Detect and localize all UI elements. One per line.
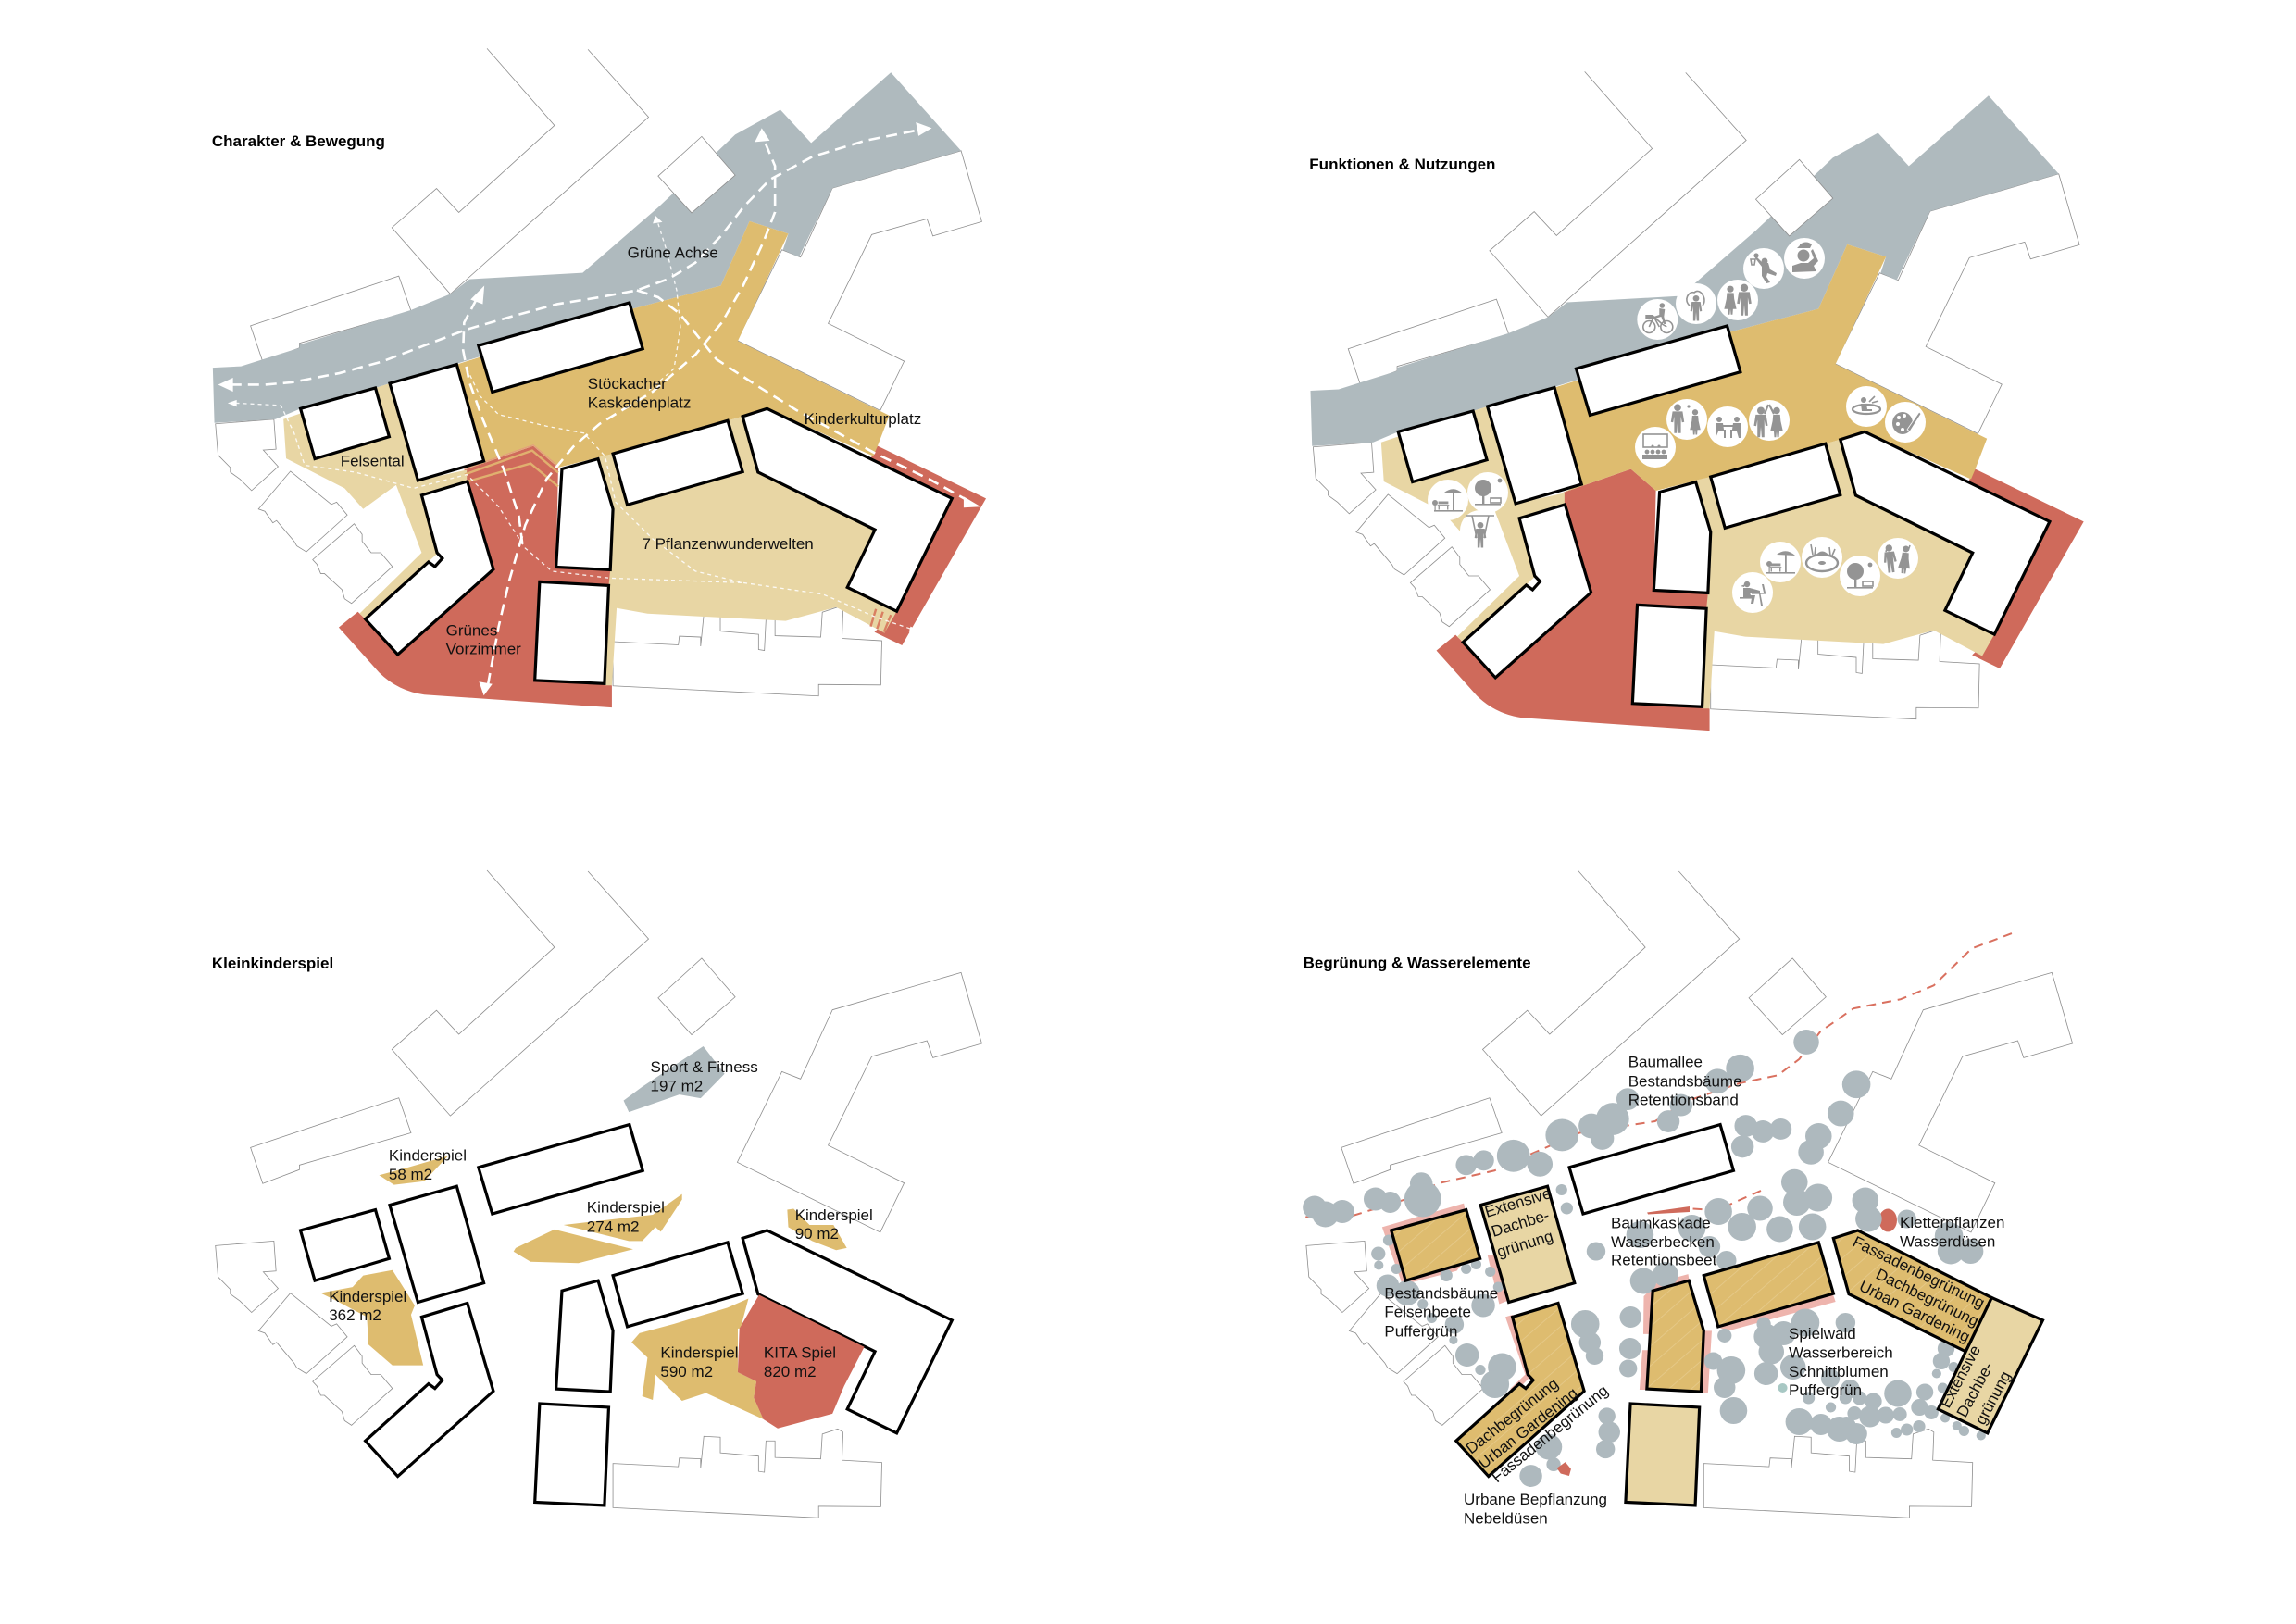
roof label: Extensive Dachbegrünung right: grünung [1972,1368,2015,1428]
label: KITA Spiel 820 m2: KITA Spiel [764,1343,836,1361]
label: Sport & Fitness: 197 m2 [650,1078,703,1095]
roof label: right wing [1850,1233,1988,1346]
label: Kinderspiel 362 m2: 362 m2 [329,1306,381,1324]
roof label: Dachbegrünung Urban Gardening: Dachbegrünung [1463,1375,1562,1457]
panel: Charakter & Bewegung [212,48,986,707]
icon: water play [1846,386,1887,427]
icon: outdoor cinema [1635,427,1676,468]
icon: tree and bench 2 [1840,556,1880,596]
roof label: Extensive Dachbegrünung left: grünung [1495,1227,1555,1261]
roof label: Extensive Dachbegrünung right: Extensive [1937,1343,1984,1411]
label: Kinderspiel 58 m2: 58 m2 [389,1166,432,1183]
icon: basketball [1743,248,1784,289]
label: Kinderspiel 590 m2: Kinderspiel [660,1343,739,1361]
label: Stöckacher Kaskadenplatz: Stöckacher [588,375,667,393]
label: Kinderspiel 274 m2: Kinderspiel [587,1198,665,1217]
movement arrows [218,122,980,695]
label: Spielwald: Wasserbereich [1789,1343,1893,1361]
roof label: Extensive Dachbegrünung left: Dachbe- [1490,1206,1552,1241]
label: Kletterpflanzen: Kletterpflanzen [1900,1214,2004,1231]
label: Kinderspiel 274 m2: 274 m2 [587,1218,640,1235]
label: Kinderspiel 362 m2: Kinderspiel [329,1288,406,1305]
label: Spielwald: Spielwald [1789,1325,1856,1343]
icon: high five [1749,400,1790,441]
label: Grünes Vorzimmer: Grünes [446,622,497,640]
label: Bestandsbäume: Felsenbeete [1384,1303,1471,1320]
label: Spielwald: Schnittblumen [1789,1363,1889,1380]
heading: Kleinkinderspiel: Kleinkinderspiel [212,955,333,972]
label: Bestandsbäume: Bestandsbäume [1384,1285,1498,1302]
icon: couple walking [1717,280,1758,320]
site plan areas [213,48,986,707]
icon: tree and bench [1467,472,1508,513]
heading: Funktionen & Nutzungen: Funktionen & Nutzungen [1309,156,1495,173]
label: Stöckacher Kaskadenplatz: Kaskadenplatz [588,394,691,411]
label: Bestandsbäume: Puffergrün [1384,1322,1457,1340]
label: Baumallee: Bestandsbäume [1628,1073,1742,1091]
icon: dancing children [1878,538,1918,579]
roof label: right wing: Dachbegrünung [1873,1266,1981,1330]
panel: Funktionen & Nutzungen [1309,71,2084,731]
label: Baumallee: Retentionsband [1628,1092,1739,1109]
facade label: Fassadenbegrünung: Fassadenbegrünung [1489,1381,1612,1486]
icon: head with cap [1784,238,1825,279]
icon: bicycle [1637,299,1678,340]
site plan areas [1310,71,2084,731]
roof label: Dachbegrünung Urban Gardening: Urban Gardening [1475,1384,1581,1472]
label: Kinderspiel 590 m2: 590 m2 [660,1363,713,1380]
icon: picnic under umbrella 2 [1760,542,1801,582]
panel: Kleinkinderspiel [212,870,981,1518]
roof label: Extensive Dachbegrünung left [1483,1184,1555,1261]
base plan [216,870,981,1518]
heading: Begrünung & Wasserelemente: Begrünung & Wasserelemente [1304,954,1531,971]
roof label: right wing: Urban Gardening [1856,1278,1973,1346]
icon: table with people [1707,406,1748,447]
label: Spielwald: Puffergrün [1789,1381,1862,1399]
facade greening, water line, trees [1305,933,2012,1487]
roof label: Extensive Dachbegrünung left: Extensive [1483,1184,1554,1221]
icon: palette [1885,402,1926,443]
label: Grüne Achse: Grüne Achse [628,244,718,262]
label: Kinderspiel 90 m2: 90 m2 [795,1225,839,1243]
label: Baumkaskade: Wasserbecken [1611,1233,1715,1251]
play areas [320,1046,865,1429]
label: Urbane Bepflanzung: Urbane Bepflanzung [1464,1491,1607,1508]
label: Kinderspiel 58 m2: Kinderspiel [389,1146,467,1164]
label: Baumkaskade: Retentionsbeet [1611,1252,1717,1269]
panel: Begrünung & Wasserelemente [1303,870,2073,1527]
label: Urbane Bepflanzung: Nebeldüsen [1464,1509,1548,1527]
icon: swing [1460,510,1501,551]
roof label: Extensive Dachbegrünung right: Dachbe- [1953,1359,1997,1420]
label: Baumkaskade: Baumkaskade [1611,1214,1711,1231]
label: Sport & Fitness: Sport & Fitness [650,1058,758,1076]
label: Felsental: Felsental [341,452,405,470]
label: Grünes Vorzimmer: Vorzimmer [446,641,521,657]
roof label: Extensive Dachbegrünung right [1937,1343,2015,1428]
label: KITA Spiel 820 m2: 820 m2 [764,1363,817,1380]
planned buildings with roof greening [1391,1125,2042,1505]
label: Kletterpflanzen: Wasserdüsen [1900,1232,1995,1250]
crossing stripes [464,445,891,632]
roof label: right wing: Fassadenbegrünung [1850,1233,1988,1312]
trees [1303,1181,1986,1444]
label: Kinderspiel 90 m2: Kinderspiel [795,1206,873,1224]
icon: pond with plants [1802,537,1842,578]
label: Baumallee: Baumallee [1628,1053,1703,1070]
icon: jump rope [1676,283,1716,324]
icon: picnic under umbrella [1428,480,1468,520]
heading: Charakter & Bewegung: Charakter & Bewegung [212,132,385,150]
icon: person at laptop [1732,572,1773,613]
icon: two people talking [1666,399,1707,440]
label: Kinderkulturplatz: Kinderkulturplatz [805,410,921,428]
label: 7 Pflanzenwunderwelten: 7 Pflanzenwunderwelten [643,535,814,553]
base context [1306,870,2073,1518]
